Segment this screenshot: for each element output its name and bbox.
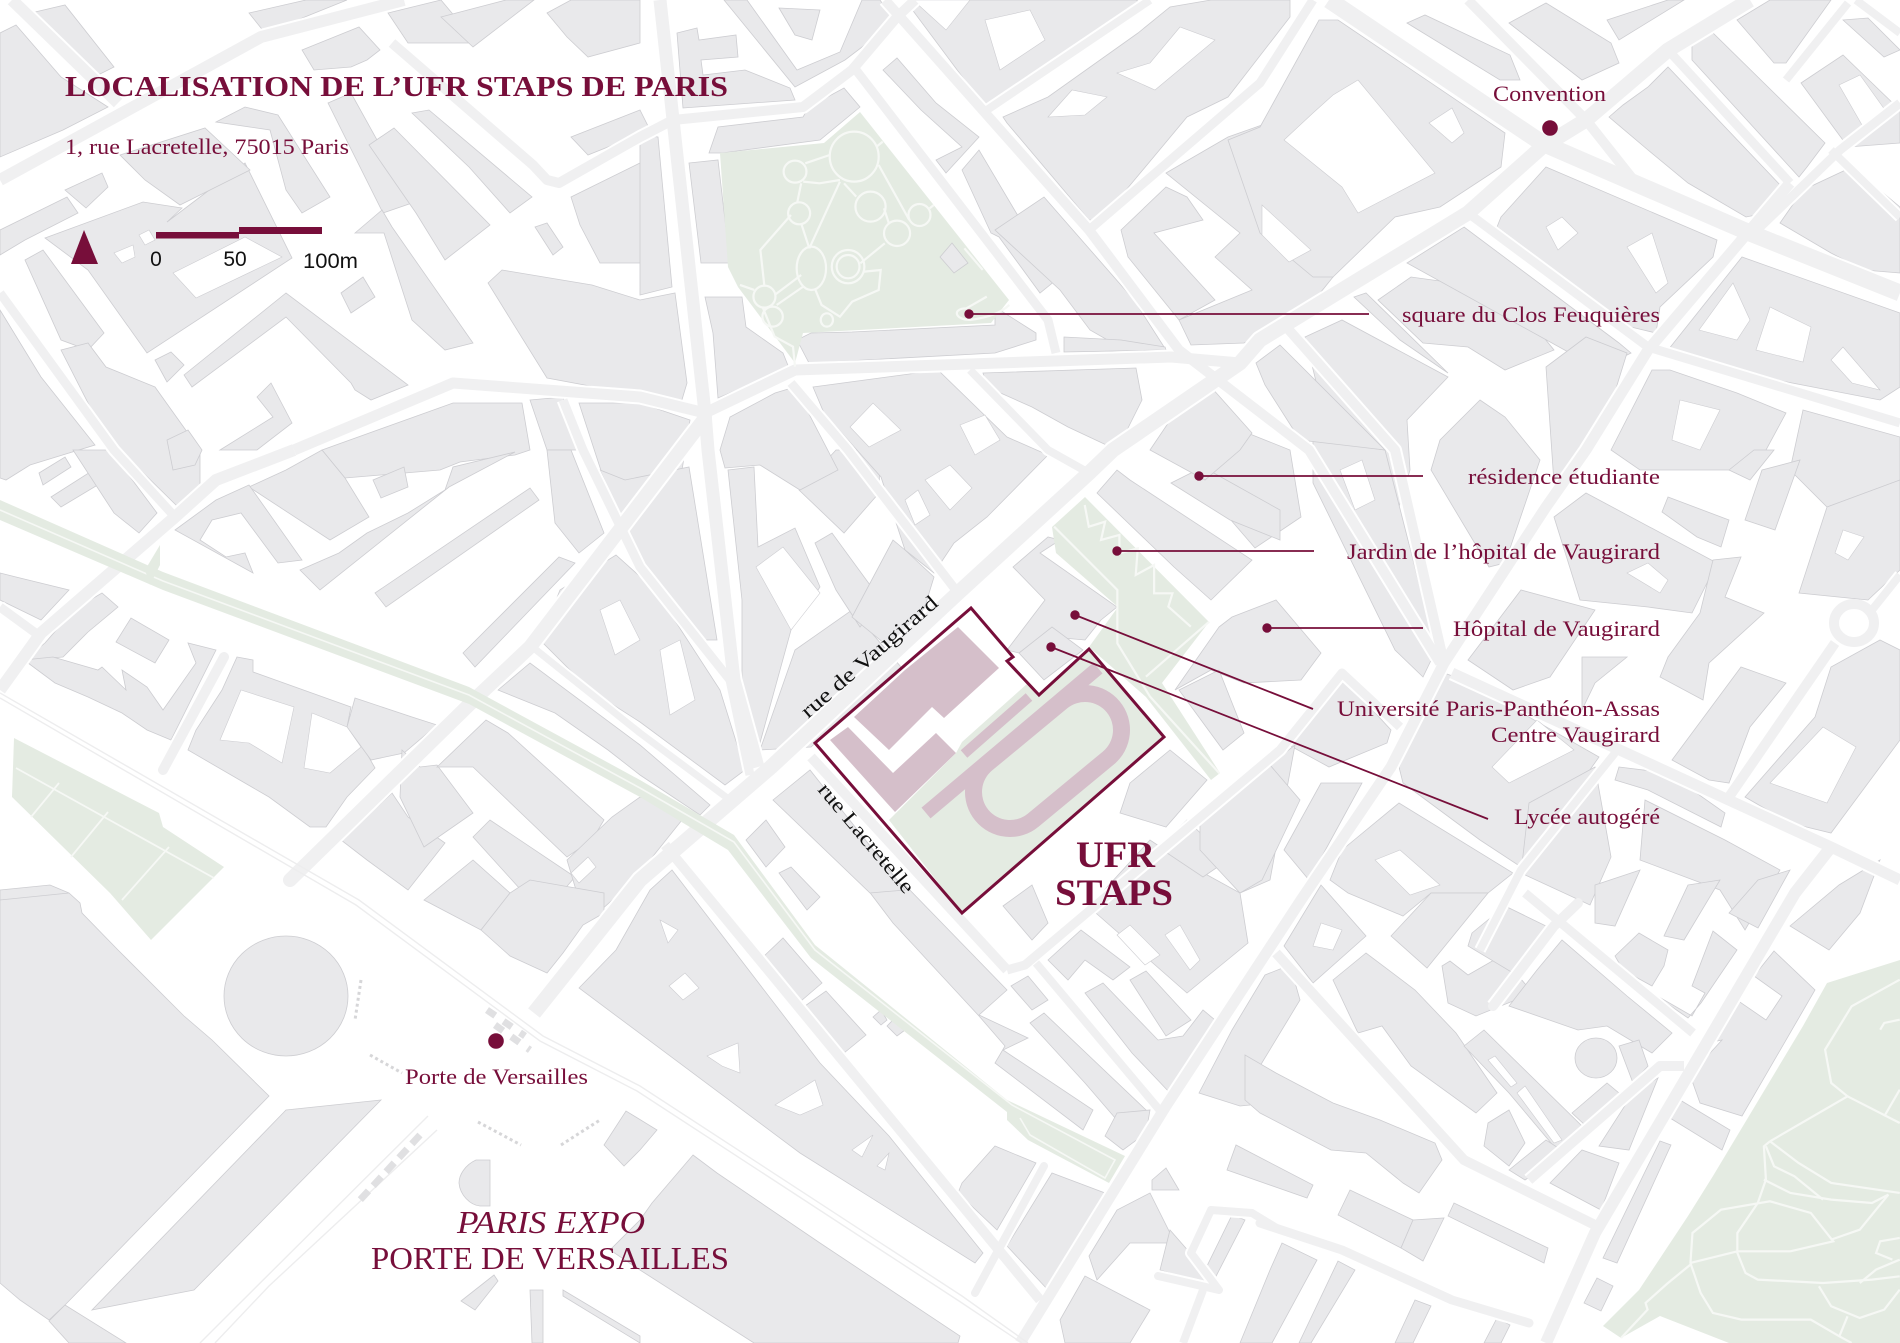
label: square du Clos Feuquières: square du Clos Feuquières bbox=[1402, 302, 1660, 327]
label: Université Paris-Panthéon-Assas: Université Paris-Panthéon-Assas bbox=[1337, 696, 1660, 721]
street label: rue Lacretelle: rue Lacretelle bbox=[813, 778, 920, 898]
label: Paris Expo: PARIS EXPO bbox=[456, 1204, 645, 1240]
park: jardin de l'hôpital de Vaugirard bbox=[1052, 497, 1220, 780]
label: résidence étudiante: résidence étudiante bbox=[1468, 464, 1660, 489]
label: Université Paris-Panthéon-Assas bbox=[1337, 696, 1660, 747]
park: lower-left lawn bbox=[12, 738, 224, 940]
metro: Porte de Versailles: Porte de Versailles bbox=[405, 1064, 588, 1089]
metro: Convention bbox=[1493, 81, 1606, 136]
park: square du Clos Feuquières bbox=[720, 112, 1009, 367]
leader: square du Clos Feuquières bbox=[965, 310, 1369, 318]
address: 1, rue Lacretelle, 75015 Paris bbox=[65, 134, 349, 159]
label: UFR STAPS: STAPS bbox=[1055, 873, 1173, 914]
label: Jardin de l'hôpital de Vaugirard: Jardin de l’hôpital de Vaugirard bbox=[1347, 539, 1660, 564]
site boundary bbox=[815, 608, 1164, 913]
street label: rue de Vaugirard: rue de Vaugirard bbox=[796, 590, 943, 723]
park: rail corridor promenade bbox=[0, 500, 1125, 1183]
label: UFR STAPS: UFR bbox=[1076, 835, 1156, 876]
label: UFR STAPS bbox=[1055, 835, 1173, 914]
building: gymnasium wing bbox=[830, 727, 956, 812]
leader lines and markers bbox=[965, 310, 1488, 819]
label: Paris Expo bbox=[371, 1204, 729, 1276]
leader: jardin de l'hôpital bbox=[1113, 547, 1314, 555]
building: main block bbox=[854, 627, 999, 750]
running track bbox=[1010, 730, 1085, 792]
UFR STAPS site bbox=[815, 608, 1164, 913]
rail tracks bbox=[0, 693, 1028, 1343]
leader: hôpital de Vaugirard bbox=[1263, 624, 1423, 632]
label: Université Paris-Panthéon-Assas: Centre Vaugirard bbox=[1491, 722, 1660, 747]
lawn inside the site bbox=[889, 649, 1164, 913]
metro: Convention: Convention bbox=[1493, 81, 1606, 106]
scale bar bbox=[150, 227, 358, 273]
label: Lycée autogéré: Lycée autogéré bbox=[1514, 804, 1660, 829]
sprint lane bbox=[926, 668, 1098, 813]
scale bar: 50 bbox=[223, 248, 247, 271]
icon: north arrow bbox=[71, 230, 98, 264]
park: Parc Georges-Brassens bbox=[1603, 960, 1900, 1343]
secondary sports strip bbox=[964, 697, 1029, 754]
scale bar: 100m bbox=[303, 250, 358, 273]
title: LOCALISATION DE L’UFR STAPS DE PARIS bbox=[65, 72, 728, 103]
metro: Porte de Versailles bbox=[405, 1033, 588, 1089]
label: Hôpital de Vaugirard: Hôpital de Vaugirard bbox=[1453, 616, 1660, 641]
leader: université Paris-Panthéon-Assas bbox=[1071, 611, 1313, 709]
site background bbox=[815, 608, 1164, 913]
leader: résidence étudiante bbox=[1195, 472, 1423, 480]
leader: lycée autogéré bbox=[1047, 643, 1488, 819]
scale bar: 0 bbox=[150, 248, 162, 271]
label: Paris Expo: PORTE DE VERSAILLES bbox=[371, 1240, 729, 1276]
